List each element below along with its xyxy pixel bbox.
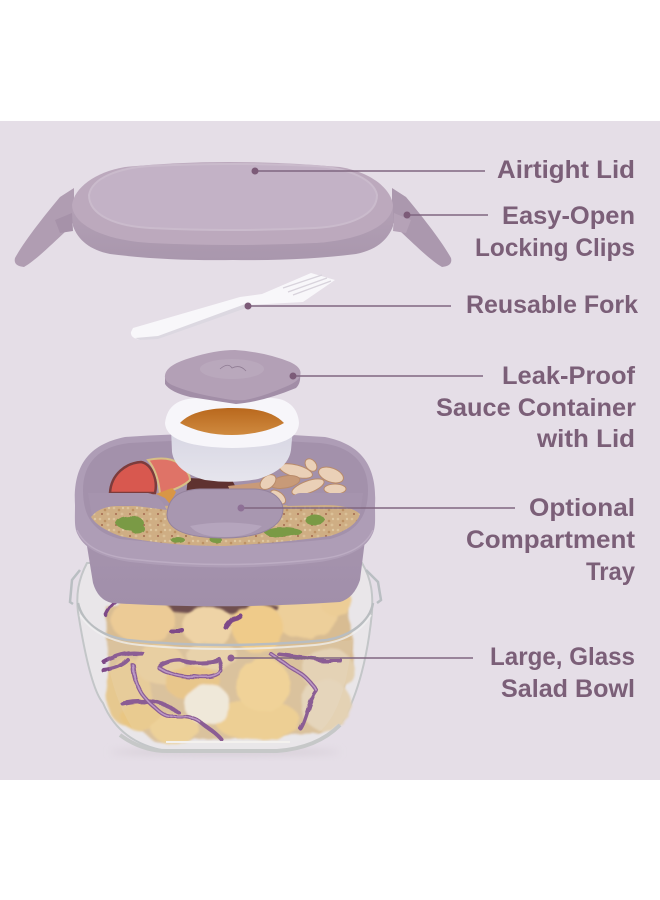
tray body	[86, 540, 365, 606]
callout: fork	[244, 302, 451, 310]
label: Leak-Proof Sauce Container with Lid	[436, 362, 636, 453]
callout lines	[228, 168, 515, 662]
leak-proof sauce container with lid	[165, 350, 301, 482]
icon: right locking clip	[392, 188, 451, 267]
callout: bowl	[228, 654, 473, 662]
sauce lid	[165, 350, 301, 404]
front compartment food: quinoa and herbs	[91, 505, 360, 546]
optional compartment tray	[75, 434, 375, 606]
label: Leak-Proof Sauce Container with Lid: Leak-Proof	[502, 362, 636, 390]
bowl shadow	[110, 749, 340, 755]
label: Large, Glass Salad Bowl: Salad Bowl	[501, 675, 635, 703]
bowl food: roasted cauliflower and cabbage	[103, 588, 354, 744]
label: Easy-Open Locking Clips: Easy-Open	[502, 202, 635, 230]
reusable fork	[131, 273, 335, 340]
label: Reusable Fork: Reusable Fork	[466, 291, 638, 319]
tray dividers and centre pod	[88, 489, 363, 538]
bowl glass body	[77, 563, 372, 751]
background panel	[0, 121, 660, 780]
lid raised panel	[89, 164, 377, 230]
icon: left locking clip	[15, 188, 74, 267]
label: Optional Compartment Tray: Compartment	[466, 526, 636, 554]
sauce cup	[171, 428, 293, 482]
callout: airtight lid	[252, 168, 485, 174]
callout: locking clips	[404, 212, 488, 218]
label: Easy-Open Locking Clips: Locking Clips	[475, 234, 635, 262]
label: Airtight Lid: Airtight Lid	[497, 156, 635, 184]
callout: tray	[238, 504, 515, 512]
large glass salad bowl	[70, 563, 381, 755]
airtight lid	[15, 162, 451, 267]
sauce cup rim	[165, 398, 299, 448]
label: Optional Compartment Tray: Tray	[586, 558, 635, 586]
label: Leak-Proof Sauce Container with Lid: Sauce Container	[436, 394, 636, 422]
sauce	[180, 408, 284, 435]
lid underside rim	[72, 205, 393, 260]
back compartment food: figs and almonds	[110, 456, 346, 507]
label: Large, Glass Salad Bowl	[490, 643, 635, 703]
label: Optional Compartment Tray: Optional	[529, 494, 635, 522]
label: Easy-Open Locking Clips	[475, 202, 635, 262]
bowl glass rim and highlights	[70, 570, 381, 751]
glass haze over food	[104, 640, 352, 750]
label: Optional Compartment Tray	[466, 494, 636, 586]
label: Large, Glass Salad Bowl: Large, Glass	[490, 643, 635, 671]
tray inner wall	[83, 440, 368, 545]
tray rim	[75, 434, 375, 568]
callout: sauce container	[290, 372, 483, 380]
label: Leak-Proof Sauce Container with Lid: with Lid	[536, 425, 635, 453]
lid top surface	[72, 162, 393, 245]
